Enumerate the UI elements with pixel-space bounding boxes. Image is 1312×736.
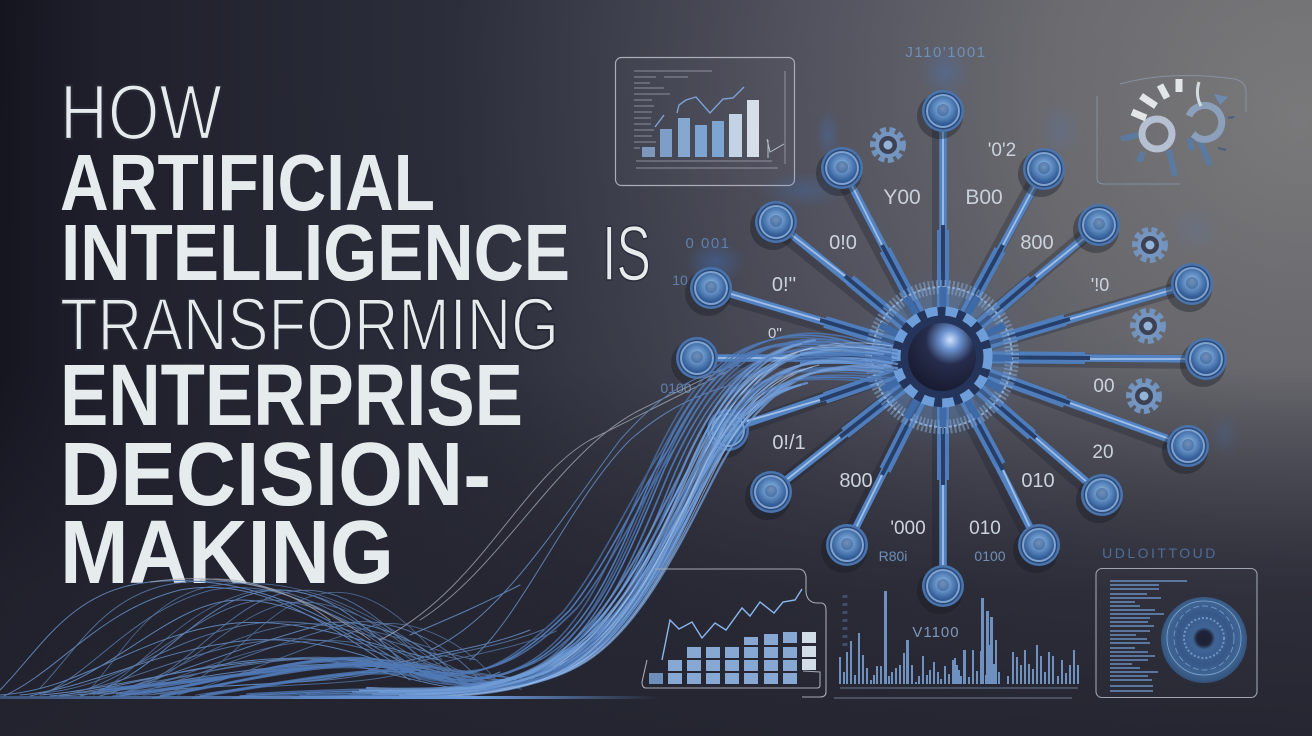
binary number labels: 10 bbox=[672, 272, 688, 288]
binary number labels: 0'' bbox=[768, 325, 782, 342]
blue glow accents bbox=[685, 44, 1241, 459]
binary number labels: Y00 bbox=[883, 186, 921, 209]
binary number labels: J110'1001 bbox=[905, 44, 987, 61]
title line: DECISION-: DECISION- bbox=[60, 425, 491, 525]
binary number labels: 0100 bbox=[660, 380, 692, 396]
binary number labels: V1100 bbox=[912, 624, 960, 641]
panel: top-right circuit icon bbox=[1097, 75, 1246, 184]
baseline glow bbox=[0, 696, 660, 699]
binary number labels: 0!'' bbox=[772, 274, 796, 296]
chart: spectrum bars bbox=[834, 591, 1079, 698]
binary number labels: 0100 bbox=[974, 548, 1006, 564]
spokes bbox=[693, 111, 1206, 589]
title line: ARTIFICIAL: ARTIFICIAL bbox=[60, 138, 435, 227]
flowing data wires bbox=[0, 333, 897, 698]
disc bbox=[1161, 597, 1247, 683]
title line: HOW: HOW bbox=[60, 68, 222, 156]
title line: INTELLIGENCE IS: INTELLIGENCE bbox=[61, 208, 570, 297]
binary number labels: 0!0 bbox=[829, 232, 857, 254]
binary number labels: 800 bbox=[839, 470, 873, 492]
title line: INTELLIGENCE IS: IS bbox=[602, 209, 651, 297]
nodes bbox=[671, 90, 1227, 614]
panel: bottom-left stepped chart bbox=[642, 569, 826, 697]
binary number labels: 00 bbox=[1093, 376, 1115, 397]
panel: top-left bar and line chart bbox=[616, 58, 794, 186]
binary number labels: 010 bbox=[1021, 470, 1055, 492]
icon: gears bbox=[874, 130, 1164, 410]
binary number labels: 0!/1 bbox=[772, 432, 806, 454]
title bbox=[60, 68, 651, 603]
central hub bbox=[847, 262, 1037, 452]
binary number labels: B00 bbox=[965, 186, 1003, 209]
panel: bottom-right data and disc bbox=[1096, 568, 1257, 698]
binary number labels: UDLOITTOUD bbox=[1102, 545, 1218, 561]
binary number labels: '0'2 bbox=[988, 140, 1016, 161]
icon: gear right 3 bbox=[1130, 382, 1158, 410]
title line: MAKING: MAKING bbox=[60, 503, 394, 603]
binary number labels: '000 bbox=[890, 518, 926, 539]
icon: gear top bbox=[874, 130, 902, 160]
binary number labels bbox=[660, 44, 1218, 641]
title line: TRANSFORMING: TRANSFORMING bbox=[60, 283, 559, 366]
title line: ENTERPRISE: ENTERPRISE bbox=[60, 347, 523, 444]
icon: gear right 1 bbox=[1136, 230, 1164, 260]
text lines bbox=[1110, 581, 1187, 691]
binary number labels: 800 bbox=[1020, 232, 1054, 254]
binary number labels: 010 bbox=[969, 518, 1001, 539]
binary number labels: 20 bbox=[1092, 442, 1114, 463]
icon: gear right 2 bbox=[1134, 312, 1162, 340]
binary number labels: '!0 bbox=[1091, 275, 1109, 295]
binary number labels: 0 001 bbox=[685, 235, 731, 252]
binary number labels: R80i bbox=[879, 548, 907, 564]
